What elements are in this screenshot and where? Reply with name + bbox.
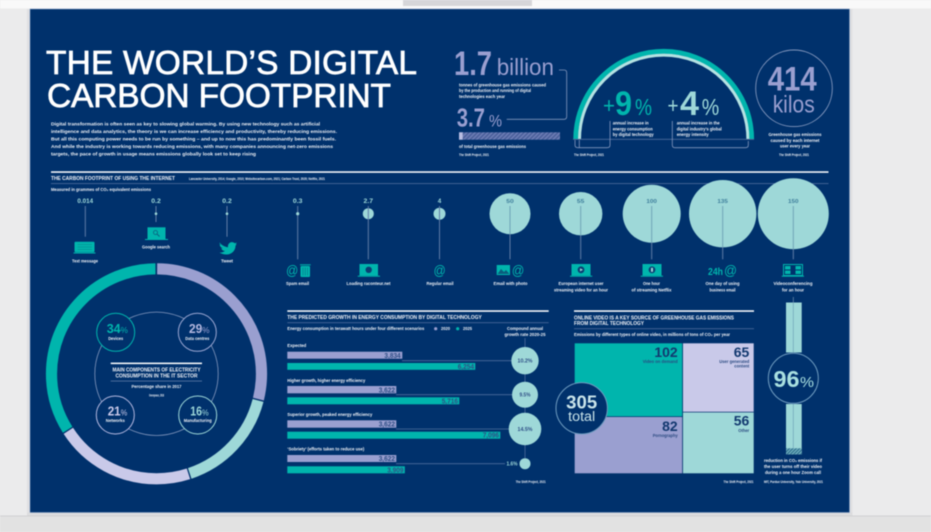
stat: 414 kilos: 414: [768, 61, 817, 99]
scenario: higher growth: 9.5%: [520, 393, 531, 399]
intro text: targets, the pace of growth in usage means emissions globally look set to keep rising: [51, 152, 256, 158]
cell: video on demand: Video on demand: [643, 359, 678, 364]
item: email with photo: [490, 193, 530, 286]
bar chart heading: THE PREDICTED GROWTH IN ENERGY CONSUMPTION BY DIGITAL TECHNOLOGY: [287, 315, 482, 321]
panel: 96% reduction column: reduction in CO₂ emissions if: [764, 458, 822, 463]
legend: 2025: [463, 326, 472, 331]
segment: networks 21%: 21: [108, 403, 121, 418]
intro text: intelligence and data analytics, the theory is we can increase efficiency and productivity, thereby reducing emissions.: [51, 129, 337, 135]
stat: 414 kilos: kilos: [773, 92, 815, 119]
stat: +9%: annual increase in: [613, 120, 649, 126]
item: google search: Google search: [142, 244, 170, 250]
icon: text message: [74, 242, 96, 253]
item: text message: [72, 199, 98, 264]
item: text message: 0.014: [77, 199, 94, 205]
scenario: higher growth: 3,622: [379, 387, 395, 394]
scenario: higher growth: [287, 378, 538, 408]
bar chart heading: Energy consumption in terawatt hours under four different scenarios: [287, 326, 425, 331]
bar chart heading: [287, 310, 549, 331]
section header: carbon footprint of using the internet: THE CARBON FOOTPRINT OF USING THE INTERNET: [51, 176, 175, 182]
cell: user generated content: content: [734, 364, 750, 368]
growth rate column: [504, 326, 546, 458]
cell: video on demand: [575, 343, 682, 416]
item: business email: business email: [710, 288, 736, 292]
stat: +4%: annual increase in the: [677, 120, 720, 126]
cell: pornography: 82: [662, 418, 678, 434]
intro text: Digital transformation is often seen as key to slowing global warming. By using new technology such as artificial: [51, 122, 320, 128]
scenario: higher growth: 5,716: [442, 398, 458, 405]
treemap heading: Emissions by different types of online video, in millions of tons of CO₂ per year: [574, 332, 730, 337]
cell: user generated content: User generated: [719, 359, 750, 364]
segment: data centres 29%: 29: [189, 321, 202, 336]
item: text message: Text message: [72, 258, 98, 264]
icon: 24h at sign: @: [724, 262, 737, 278]
item: regular email: 4: [438, 199, 442, 205]
growth rate column: Compound annual: [507, 326, 543, 331]
scenario: expected: Expected: [287, 343, 306, 348]
treemap heading: [574, 310, 754, 337]
stat: 414 kilos: caused by each internet: [770, 138, 820, 143]
item: streaming video: European internet user: [558, 281, 604, 286]
stat: +4%: %: [702, 94, 719, 120]
item: loading raconteur.net: 2.7: [364, 199, 374, 205]
item: streaming netflix: of streaming Netflix: [632, 288, 672, 292]
segment: data centres 29%: [178, 313, 216, 351]
item: streaming netflix: 100: [646, 199, 657, 205]
stat: 1.7 billion: technologies each year: [459, 94, 505, 99]
stat: half-circle arc with energy growth: [573, 51, 754, 157]
panel: 96% reduction column: MIT, Purdue University, Yale University, 2021: [764, 480, 823, 484]
stat: 1.7 billion: by the production and running of digital: [459, 88, 531, 93]
stat: 3.7 percent: The Shift Project, 2021: [459, 153, 489, 157]
donut heading: MAIN COMPONENTS OF ELECTRICITY: [112, 367, 201, 373]
item: videoconferencing: for an hour: [782, 288, 804, 292]
scenario: sobriety: 1.6%: [506, 462, 518, 468]
panel: 96% reduction column: the user turns off their video: [764, 464, 822, 469]
scenario: superior growth: 7,096: [483, 433, 499, 440]
item: spam email: 0.3: [293, 199, 303, 205]
item: streaming video: [554, 192, 608, 292]
icon: at sign: @: [434, 262, 446, 278]
icon: laptop with play button: [570, 264, 592, 277]
segment: manufacturing 16%: [179, 396, 217, 434]
stat: 3.7 percent: 3.7: [457, 103, 485, 133]
stat: +9%: +: [603, 93, 615, 118]
item: loading raconteur.net: Loading raconteur.net: [346, 281, 391, 286]
item: loading raconteur.net: [346, 199, 391, 286]
scenario: sobriety: ‘Sobriety’ (efforts taken to reduce use): [287, 446, 365, 452]
title: [46, 45, 417, 115]
icon: laptop with video panes: [782, 264, 804, 277]
stat: +9%: %: [635, 94, 652, 120]
intro text: But all this computing power needs to be run by something – and up to now this has predominantly been fossil fuels.: [51, 137, 336, 143]
stat: 1.7 billion: tonnes of greenhouse gas emissions caused: [459, 82, 546, 88]
item: streaming video: 55: [577, 199, 584, 205]
stat: 3.7 percent: %: [489, 112, 502, 131]
source: The Shift Project, 2021: [724, 480, 754, 484]
item: videoconferencing: [758, 178, 829, 292]
item: regular email: Regular email: [426, 281, 454, 286]
stat: 414 kilos: user every year: [780, 144, 810, 148]
segment: manufacturing 16%: 16: [190, 403, 202, 418]
item: streaming netflix: [623, 185, 681, 292]
treemap heading: FROM DIGITAL TECHNOLOGY: [574, 321, 645, 327]
section header: carbon footprint of using the internet: Measured in grammes of CO₂ equivalent emissions: [51, 187, 151, 192]
item: spam email: Spam email: [286, 281, 309, 286]
stat: +4%: 4: [680, 85, 699, 123]
intro text: And while the industry is working towards reducing emissions, with many companies announcing net-zero emissions: [51, 144, 333, 150]
scenario: expected: 6,254: [458, 364, 474, 371]
scenario: superior growth: 3,622: [379, 422, 395, 429]
segment: manufacturing 16%: %: [202, 408, 209, 417]
cell: user generated content: [683, 343, 754, 412]
stat: 1.7 billion: billion: [497, 54, 554, 80]
title: THE WORLD’S DIGITAL: [46, 45, 417, 82]
stat: +9%: energy consumption: [613, 126, 653, 132]
stat: +9%: [603, 85, 654, 137]
panel: 96% reduction column: during a one hour Zoom call: [765, 470, 821, 475]
icon: at sign and bin: @: [286, 262, 298, 278]
donut heading: CONSUMPTION IN THE IT SECTOR: [116, 373, 198, 379]
item: google search: [142, 199, 170, 250]
item: business email: [689, 180, 756, 292]
item: videoconferencing: 150: [788, 199, 799, 205]
segment: data centres 29%: %: [202, 326, 210, 335]
stat: 3.7 percent: of total greenhouse gas emissions: [459, 144, 526, 149]
callout: 305 total: 305: [566, 392, 597, 412]
panel: predicted growth bar chart: [287, 310, 549, 484]
legend: [434, 326, 472, 331]
item: streaming video: streaming video for an hour: [554, 288, 608, 292]
callout: 305 total: [556, 383, 607, 434]
stat: 3.7 percent: [457, 103, 560, 157]
scenario: expected: [287, 343, 539, 374]
scenario: expected: 10.2%: [518, 359, 533, 365]
stat: 1.7 billion: 1.7: [454, 45, 492, 83]
cell: other: Other: [738, 428, 750, 433]
icon: 24h at sign: [708, 262, 737, 278]
scenario: superior growth: Superior growth, peaked energy efficiency: [287, 412, 373, 417]
item: streaming netflix: One hour: [643, 281, 660, 286]
scenario: sobriety: [287, 446, 530, 474]
stat: 414 kilos: Greenhouse gas emissions: [768, 132, 822, 137]
cell: other: [683, 412, 754, 473]
growth rate column: growth rate 2020-25: [504, 332, 546, 337]
segment: devices 34%: %: [121, 326, 128, 335]
stat: 1.7 billion: [454, 45, 567, 119]
treemap: [575, 343, 754, 473]
donut heading: Greenpeace, 2018: [149, 394, 164, 398]
stat: +4%: energy intensity: [677, 132, 709, 137]
item: tweet: 0.2: [222, 199, 233, 205]
stat: +9%: 9: [615, 85, 632, 123]
segment: networks 21%: [96, 396, 134, 434]
item: email with photo: 50: [506, 199, 514, 205]
scenario: sobriety: 3,909: [387, 467, 404, 474]
panel: 96% reduction column: [764, 297, 823, 484]
intro text: [51, 122, 337, 158]
item: business email: One day of using: [706, 281, 740, 286]
section header: carbon footprint of using the internet: [51, 171, 828, 192]
stat: +4%: digital industry’s global: [677, 126, 722, 132]
donut heading: [111, 363, 202, 398]
donut chart: [52, 269, 262, 479]
segment: data centres 29%: Data centres: [185, 336, 210, 341]
icon: picture and at sign: @: [512, 262, 524, 278]
cell: pornography: Pornography: [653, 433, 678, 438]
scenario: higher growth: Higher growth, higher energy efficiency: [287, 378, 366, 383]
segment: devices 34%: Devices: [108, 336, 124, 341]
stat: 414 kilos: The Shift Project, 2021: [779, 153, 809, 157]
item: regular email: [426, 199, 454, 286]
cell: video on demand: 102: [654, 344, 678, 360]
scenario: sobriety: 3,622: [379, 456, 395, 463]
item: spam email: [286, 199, 311, 286]
donut heading: Percentage share in 2017: [132, 384, 182, 389]
item: business email: 135: [717, 199, 728, 205]
legend: 2020: [441, 326, 450, 331]
cell: user generated content: 65: [734, 344, 750, 360]
panel: 96% reduction column: 96: [774, 366, 800, 392]
segment: networks 21%: %: [121, 408, 127, 417]
segment: devices 34%: [97, 313, 135, 351]
title: CARBON FOOTPRINT: [47, 78, 391, 115]
cell: other: 56: [734, 413, 750, 429]
segment: networks 21%: Networks: [106, 418, 125, 423]
stat: +4%: +: [668, 93, 678, 118]
panel: online video treemap: [556, 310, 754, 484]
treemap heading: ONLINE VIDEO IS A KEY SOURCE OF GREENHOUSE GAS EMISSIONS: [574, 315, 735, 321]
scenario: superior growth: [287, 412, 541, 445]
stat: half-circle arc with energy growth: The Shift Project, 2021: [574, 153, 604, 157]
stat: 414 kilos: [756, 50, 832, 157]
panel: 96% reduction column: %: [800, 374, 814, 391]
cell: pornography: [575, 417, 682, 473]
icon: laptop with magnifier: [145, 227, 168, 240]
item: google search: 0.2: [151, 199, 162, 205]
section header: carbon footprint of using the internet: Lancaster University, 2014; Google, 2010; Websitecarbon.com, 2021; Carbon Trust, 2020; Netflix, 2021: [189, 177, 325, 181]
scenario: superior growth: 14.5%: [518, 427, 533, 433]
item: email with photo: Email with photo: [494, 281, 528, 286]
scenario: expected: 3,834: [384, 353, 401, 360]
icon: laptop with N badge: [641, 264, 663, 277]
item: videoconferencing: Videoconferencing: [774, 281, 813, 286]
item: tweet: Tweet: [221, 258, 233, 264]
item: tweet: [219, 199, 237, 264]
icon: laptop with dot: [358, 264, 380, 277]
segment: manufacturing 16%: Manufacturing: [184, 418, 212, 423]
stat: +9%: by digital technology: [613, 132, 654, 137]
panel: electricity consumption donut: [52, 269, 262, 479]
source: The Shift Project, 2021: [516, 480, 546, 484]
callout: 305 total: total: [568, 409, 595, 424]
icon: 24h at sign: 24h: [708, 267, 723, 278]
segment: devices 34%: 34: [107, 321, 121, 336]
stat: +4%: [668, 85, 722, 137]
icon: bird: [219, 242, 237, 254]
